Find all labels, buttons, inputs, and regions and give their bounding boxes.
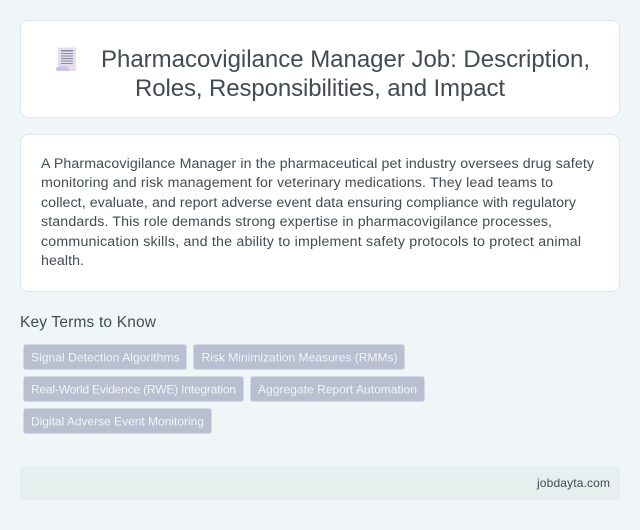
heading: key terms: Key Terms to Know [20, 314, 157, 331]
icon: document [56, 48, 76, 71]
text block: description [41, 156, 595, 269]
footer bar [20, 466, 620, 500]
tag: digital adverse event: Digital Adverse Event Monitoring [31, 414, 204, 428]
tag: aggregate report: Aggregate Report Automation [258, 382, 417, 396]
tag: real-world evidence [24, 376, 244, 402]
tag: signal detection [24, 344, 186, 370]
panel: header [20, 20, 620, 118]
text block: description: monitoring and risk management for veterinary medications. They lead teams to [41, 175, 553, 191]
text block: description: health. [41, 253, 84, 269]
tag: digital adverse event [24, 408, 212, 434]
tag: aggregate report [250, 376, 424, 402]
tag: risk minimization [194, 344, 404, 370]
title: Pharmacovigilance Manager Job: Description, [101, 46, 590, 73]
text block: description: standards. This role demands strong expertise in pharmacovigilance processes, [41, 214, 552, 230]
tag: risk minimization: Risk Minimization Measures (RMMs) [202, 350, 398, 364]
title: Roles, Responsibilities, and Impact [135, 75, 505, 102]
panel: description [20, 134, 620, 292]
text block: description: communication skills, and the ability to implement safety protocols to protect animal [41, 234, 581, 250]
text block: description: collect, evaluate, and report adverse event data ensuring compliance with regulatory [41, 195, 577, 211]
footer source: jobdayta.com [536, 476, 610, 490]
tag: real-world evidence: Real-World Evidence (RWE) Integration [31, 382, 236, 396]
text block: description: A Pharmacovigilance Manager in the pharmaceutical pet industry oversees drug safety [41, 156, 595, 172]
title [101, 46, 590, 102]
tag: signal detection: Signal Detection Algorithms [31, 350, 180, 364]
